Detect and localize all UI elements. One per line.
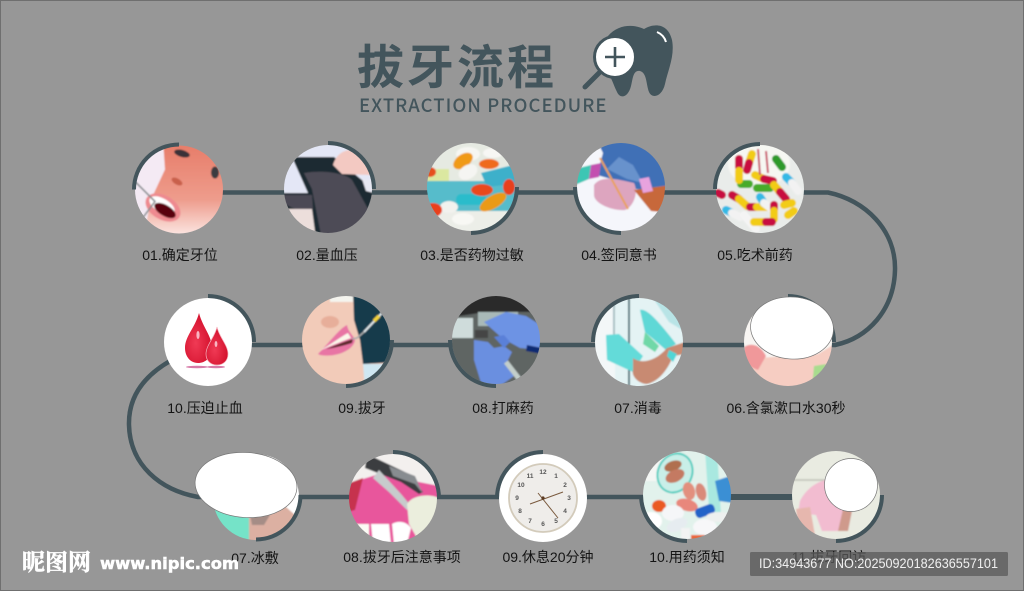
white mask ellipse (748, 294, 836, 362)
label 10 medication: 10.用药须知 (649, 549, 725, 565)
icon: clock face: 9 (515, 495, 519, 502)
watermark: nipic (22, 544, 239, 577)
watermark: id box: ID:34943677 NO:20250920182636557101 (759, 556, 998, 571)
watermark: nipic: www.nipic.com (100, 554, 239, 573)
icon: clock face: 10 (517, 482, 525, 489)
step 03 (427, 143, 519, 235)
step 09 clock (497, 452, 587, 542)
label 09 rest: 09.休息20分钟 (502, 549, 594, 565)
process path line (129, 192, 895, 497)
icon: clock face: 7 (528, 518, 532, 525)
label 03: 03.是否药物过敏 (420, 247, 524, 263)
icon: clock face: 11 (527, 473, 534, 480)
label 08: 08.打麻药 (472, 400, 534, 416)
step 09 (302, 296, 394, 388)
step 10 medication (639, 451, 731, 543)
last line segment (728, 494, 795, 500)
title (357, 29, 608, 118)
white mask circle (824, 458, 878, 512)
label 02: 02.量血压 (296, 247, 358, 263)
icon: clock face: 4 (563, 508, 567, 515)
label 09: 09.拔牙 (338, 400, 386, 416)
label 06: 06.含氯漱口水30秒 (726, 400, 846, 416)
icon: clock face: 6 (541, 521, 545, 528)
step 08 (448, 296, 540, 388)
label 11: 11.拔牙回访 (792, 549, 866, 565)
icon: clock face: 5 (554, 518, 558, 525)
icon: clock face: 8 (518, 508, 522, 515)
icon: clock face: 3 (567, 495, 571, 502)
icon: clock face: 12 (539, 469, 547, 476)
label 08 aftercare: 08.拔牙后注意事项 (343, 549, 461, 565)
label 05: 05.吃术前药 (717, 247, 793, 263)
title: EXTRACTION PROCEDURE (359, 92, 608, 118)
step 04 (573, 143, 665, 235)
white mask ellipse (193, 449, 299, 521)
icon: clock face: 1 (554, 473, 558, 480)
watermark: id box (750, 552, 1008, 576)
label 07: 07.消毒 (614, 400, 662, 416)
icon: blood drops (185, 313, 228, 368)
step 07 ice pack (194, 452, 302, 542)
title: 拔牙流程 (357, 29, 557, 98)
step 06 (744, 294, 836, 386)
icon: tooth with magnifier (585, 25, 673, 96)
watermark: nipic: 昵图网 (22, 544, 91, 577)
icon: clock face: 2 (563, 482, 567, 489)
label 10: 10.压迫止血 (167, 400, 243, 416)
step 08 aftercare (349, 450, 441, 542)
icon: clock face (509, 464, 577, 532)
step 07 (591, 294, 683, 386)
step 02 (284, 141, 376, 233)
step 05 (713, 142, 804, 233)
step 10 (164, 296, 254, 386)
step 01 (132, 142, 223, 234)
label 01: 01.确定牙位 (142, 247, 218, 263)
label row 3: 07: 07.冰敷 (231, 550, 279, 566)
step 11 follow up (792, 451, 884, 543)
label 04: 04.签同意书 (581, 247, 657, 263)
